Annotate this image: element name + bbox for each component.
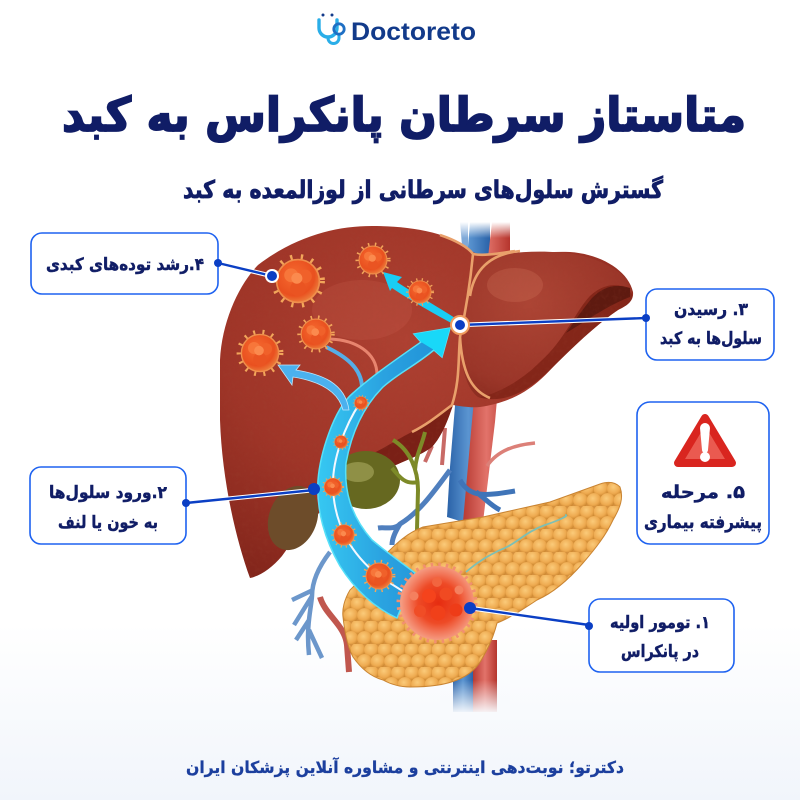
callout 1: primary tumour [464, 599, 734, 672]
callout 3: reaching the liver [451, 289, 774, 360]
thin vessels to tumour [326, 339, 377, 388]
callout 1: primary tumour: ۱. تومور اولیه [610, 613, 710, 633]
wordmark: Doctoreto [351, 18, 476, 46]
liver texture [215, 222, 640, 582]
right lobe and left lobe [220, 226, 633, 578]
pancreas [343, 482, 622, 687]
footer text: دکترتو؛ نوبت‌دهی اینترنتی و مشاوره آنلاین پزشکان ایران [186, 756, 624, 778]
callout 5: advanced stage: پیشرفته بیماری [644, 512, 762, 533]
callout 1: primary tumour: در پانکراس [621, 642, 699, 662]
logo: Doctoreto [319, 14, 476, 46]
liver [215, 222, 640, 582]
vessels: vena cava and aorta [292, 222, 535, 714]
callout 2: entering blood or lymph: ۲.ورود سلول‌ها [49, 483, 168, 503]
title: متاستاز سرطان پانکراس به کبد [62, 88, 746, 143]
gallbladder and ducts [259, 432, 425, 557]
callout 3: reaching the liver: سلول‌ها به کبد [660, 329, 762, 349]
callout 5: advanced stage: ۵. مرحله [661, 482, 745, 503]
callout 4: liver masses [31, 233, 279, 294]
icon: stethoscope [319, 14, 344, 44]
stream: spread pathway arrow [278, 272, 458, 618]
icon: warning triangle [678, 418, 732, 463]
liver metastases [239, 244, 433, 374]
subtitle: گسترش سلول‌های سرطانی از لوزالمعده به کبد [183, 175, 664, 204]
callout 3: reaching the liver: ۳. رسیدن [674, 300, 749, 320]
callout 5: advanced stage [637, 402, 769, 544]
primary tumour [399, 565, 475, 641]
callout 2: entering blood or lymph [30, 467, 320, 544]
callout 4: liver masses: ۴.رشد توده‌های کبدی [46, 255, 204, 275]
ligament [412, 235, 520, 432]
callout 2: entering blood or lymph: به خون یا لنف [58, 513, 158, 533]
circulating tumour cells [323, 396, 394, 591]
anatomy illustration [215, 222, 640, 714]
